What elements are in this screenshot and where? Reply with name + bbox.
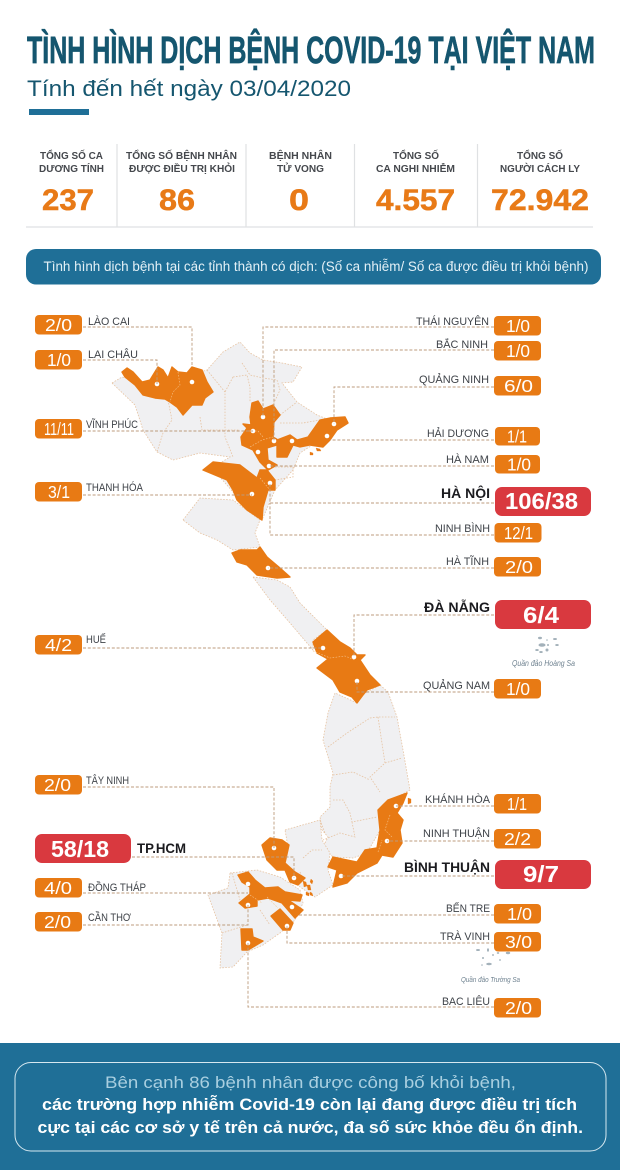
callout: Lai Châu (35, 348, 138, 370)
callout: Trà Vinh (440, 930, 541, 952)
callout: Lào Cai (35, 315, 130, 335)
stat: total recovered: ĐƯỢC ĐIỀU TRỊ KHỎI (129, 162, 235, 175)
stat: suspected cases: 4.557 (376, 184, 455, 217)
stat: people quarantined: NGƯỜI CÁCH LY (500, 162, 580, 175)
callout: Thái Nguyên: 1/0 (506, 316, 530, 336)
callout: Quảng Ninh (419, 373, 541, 396)
callout: Đồng Tháp (35, 878, 146, 898)
callout: Quảng Nam: 1/0 (506, 679, 530, 699)
callout: Hà Nam: 1/0 (507, 454, 531, 474)
callout: Lào Cai: LÀO CAI (88, 315, 130, 328)
stat: deaths (269, 149, 332, 217)
icon: Hoàng Sa islands (535, 637, 559, 653)
stat: deaths: TỬ VONG (277, 162, 324, 175)
label: Trường Sa archipelago: Quần đảo Trường Sa (461, 975, 520, 984)
callout: Bình Thuận: 9/7 (523, 861, 559, 887)
callout: Trà Vinh: 3/0 (505, 932, 532, 952)
callout: Bình Thuận: BÌNH THUẬN (404, 860, 490, 875)
callout: Vĩnh Phúc (35, 418, 138, 439)
stat: total positive cases: 237 (42, 184, 94, 217)
footer text: Bên cạnh 86 bệnh nhân được công bố khỏi bệnh, (105, 1073, 516, 1092)
callout: Quảng Nam (423, 679, 541, 699)
callout: Bạc Liêu: BAC LIÊU (442, 995, 490, 1008)
callout: Ninh Bình: 12/1 (504, 523, 533, 543)
callout: Hà Tĩnh: 2/0 (505, 557, 533, 577)
callout: Huế: HUẾ (86, 633, 106, 646)
stat: people quarantined: TỔNG SỐ (517, 148, 563, 162)
callout: Ninh Bình: NINH BÌNH (435, 522, 490, 535)
callout: Bạc Liêu: 2/0 (505, 998, 532, 1018)
callout: Bắc Ninh: 1/0 (506, 341, 530, 361)
callout: Hà Nội: HÀ NỘI (441, 486, 490, 501)
callout: Bắc Ninh (436, 338, 541, 361)
callout: Lai Châu: 1/0 (47, 350, 71, 370)
stat: total recovered (126, 148, 237, 217)
callout: Bến Tre: 1/0 (507, 904, 532, 924)
callout: Tây Ninh: TÂY NINH (86, 774, 129, 787)
subtitle: date: Tính đến hết ngày 03/04/2020 (27, 76, 351, 101)
callout: Khánh Hòa: 1/1 (507, 794, 527, 814)
callout: Quảng Nam: QUẢNG NAM (423, 679, 490, 692)
callout: Trà Vinh: TRÀ VINH (440, 930, 490, 943)
callout: Lai Châu: LAI CHÂU (88, 348, 138, 361)
accent bar (29, 109, 89, 115)
label: Hoàng Sa archipelago: Quần đảo Hoàng Sa (512, 659, 575, 668)
stat: suspected cases: TỔNG SỐ (393, 148, 439, 162)
callout: Ninh Thuận: NINH THUẬN (423, 827, 490, 840)
stat: total positive cases: TỔNG SỐ CA (40, 148, 103, 162)
callout: Đà Nẵng: 6/4 (523, 602, 559, 628)
callout: Hải Dương: 1/1 (507, 426, 527, 446)
callout: Thanh Hóa: 3/1 (48, 482, 70, 502)
stat: people quarantined: 72.942 (491, 184, 589, 217)
stat: people quarantined (491, 148, 589, 217)
callout: Bắc Ninh: BẮC NINH (436, 338, 488, 351)
callout: Cần Thơ: 2/0 (44, 912, 71, 932)
stat: total positive cases (39, 148, 104, 217)
province markers (155, 380, 398, 945)
callout: Vĩnh Phúc: 11/11 (44, 419, 74, 439)
callout: Ninh Thuận (423, 827, 541, 849)
callout: Bình Thuận (404, 860, 591, 889)
stat: suspected cases (376, 148, 455, 217)
footer text (38, 1073, 583, 1137)
callout: Tây Ninh: 2/0 (44, 775, 71, 795)
callout: Thái Nguyên: THÁI NGUYÊN (416, 315, 489, 328)
callout: Vĩnh Phúc: VĨNH PHÚC (86, 418, 138, 431)
callout: Thanh Hóa (35, 481, 144, 502)
callout: TP.HCM: 58/18 (51, 836, 109, 862)
callout: Bạc Liêu (442, 995, 541, 1018)
stat: total recovered: 86 (159, 184, 195, 217)
panel: national totals (26, 144, 593, 227)
section banner (26, 249, 601, 284)
callout: Đà Nẵng: ĐÀ NẴNG (424, 600, 490, 615)
callout: Hải Dương (427, 426, 540, 446)
callout: Hà Nội (441, 486, 591, 516)
callout: Huế (35, 633, 106, 655)
callout: Đà Nẵng (424, 600, 591, 629)
callout: Hà Tĩnh: HÀ TĨNH (446, 555, 489, 568)
callout: Cần Thơ (35, 911, 131, 932)
callout: Quảng Ninh: QUẢNG NINH (419, 373, 489, 386)
stat: suspected cases: CA NGHI NHIỄM (376, 162, 455, 175)
connector lines (83, 327, 494, 1007)
callout: Hà Nội: 106/38 (505, 488, 578, 514)
section banner: Tình hình dịch bệnh tại các tỉnh thành có dịch: (Số ca nhiễm/ Số ca được điều trị khỏi bệnh) (44, 259, 588, 274)
callout: Tây Ninh (35, 774, 129, 795)
footer text: cực tại các cơ sở y tế trên cả nước, đa số sức khỏe đều ổn định. (38, 1118, 583, 1137)
map of Vietnam (112, 342, 411, 968)
callout: TP.HCM: TP.HCM (137, 841, 186, 856)
callout: Cần Thơ: CẦN THƠ (88, 911, 131, 924)
stat: deaths: 0 (289, 184, 309, 217)
callout: Bến Tre (446, 902, 541, 924)
callout: Thanh Hóa: THANH HÓA (86, 481, 144, 494)
callout: Hà Nam: HÀ NAM (446, 453, 489, 466)
callout: Hà Tĩnh (446, 555, 541, 577)
callout: Ninh Thuận: 2/2 (504, 829, 531, 849)
callout: Huế: 4/2 (45, 635, 72, 655)
footer text: các trường hợp nhiễm Covid-19 còn lại đang được điều trị tích (42, 1095, 577, 1114)
land: provinces with cases (122, 367, 411, 950)
icon: Trường Sa islands (476, 948, 510, 966)
callout: Khánh Hòa (425, 793, 541, 814)
panel: footer note (0, 1043, 620, 1170)
callout: Đồng Tháp: ĐỒNG THÁP (88, 881, 146, 894)
callout: Lào Cai: 2/0 (45, 315, 72, 335)
callout: Hải Dương: HẢI DƯƠNG (427, 427, 489, 440)
callout: Khánh Hòa: KHÁNH HÒA (425, 793, 491, 806)
callout: Đồng Tháp: 4/0 (44, 878, 72, 898)
stat: total recovered: TỔNG SỐ BỆNH NHÂN (126, 148, 237, 162)
stat: deaths: BỆNH NHÂN (269, 149, 332, 162)
callout: TP.HCM (35, 834, 186, 863)
callout: Bến Tre: BẾN TRE (446, 902, 490, 915)
callout: Thái Nguyên (416, 315, 541, 336)
stat: total positive cases: DƯƠNG TÍNH (39, 162, 104, 175)
callout: Hà Nam (446, 453, 540, 474)
callout: Ninh Bình (435, 522, 542, 543)
callout: Quảng Ninh: 6/0 (504, 376, 533, 396)
land: provinces without cases (112, 342, 410, 968)
